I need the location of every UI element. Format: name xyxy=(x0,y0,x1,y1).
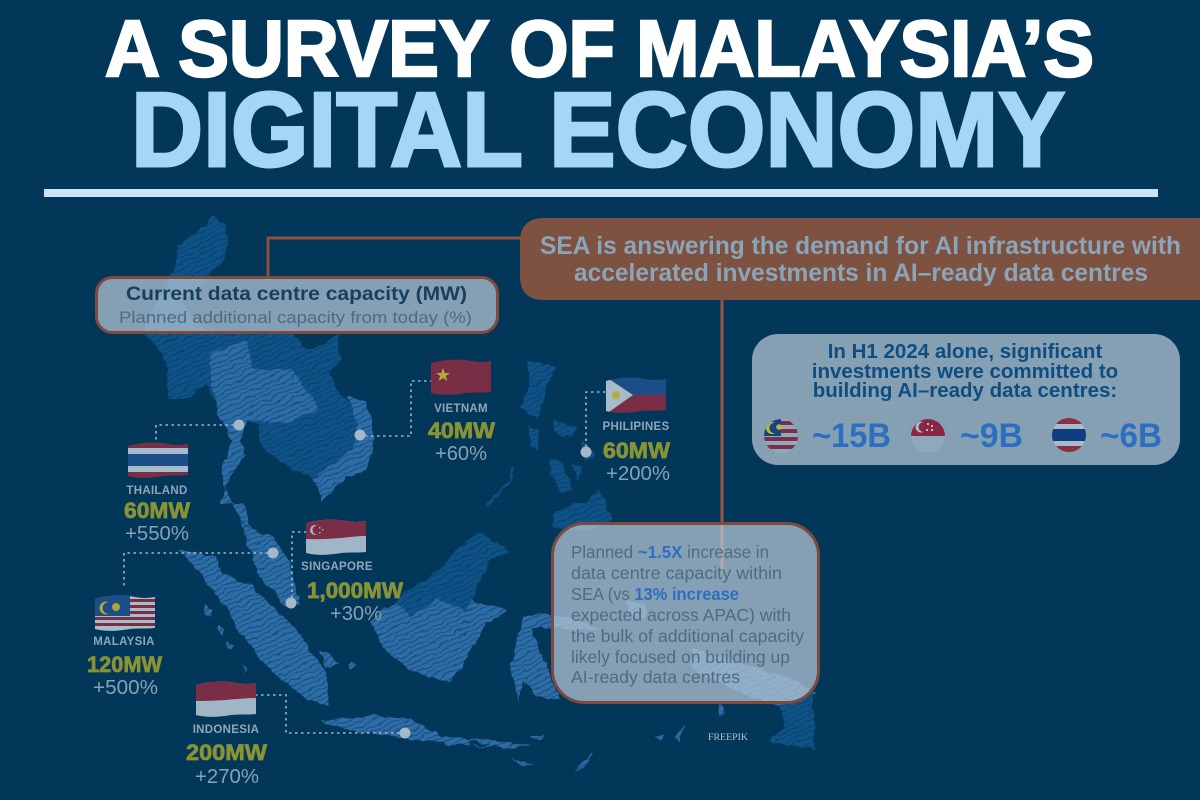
country: Thailand xyxy=(124,420,244,545)
map of Southeast Asia xyxy=(143,215,817,770)
title: DIGITAL ECONOMY xyxy=(131,71,1065,189)
investments heading: building AI–ready data centres: xyxy=(813,379,1117,402)
country: Vietnam xyxy=(354,359,495,465)
country: Philippines: PHILIPINES xyxy=(603,421,669,433)
flag: Singapore xyxy=(306,519,366,556)
value: Thailand investment: ~6B xyxy=(1100,417,1162,455)
investments heading: investments were committed to xyxy=(812,360,1118,383)
country: Vietnam: +60% xyxy=(435,443,487,465)
country: Singapore xyxy=(286,519,403,625)
country: Malaysia xyxy=(87,548,278,699)
country: Philippines xyxy=(580,377,670,485)
callout: planned capacity increase xyxy=(552,524,818,702)
country: Thailand: THAILAND xyxy=(126,485,188,497)
banner: SEA investments: SEA is answering the demand for AI infrastructure with xyxy=(540,232,1181,260)
title: A SURVEY OF MALAYSIA’S xyxy=(105,4,1094,93)
flag: Indonesia xyxy=(196,681,256,718)
country: Singapore: 1,000MW xyxy=(307,578,403,603)
callout: planned capacity increase: expected across APAC) with xyxy=(571,605,791,625)
legend subheading: Planned additional capacity from today (%) xyxy=(119,308,472,327)
panel: legend xyxy=(96,278,498,332)
icon: Malaysia flag circle xyxy=(764,419,798,453)
country: Thailand: +550% xyxy=(125,523,189,545)
icon: Singapore flag circle xyxy=(911,419,945,453)
country: Indonesia: 200MW xyxy=(186,740,267,765)
country: Indonesia xyxy=(186,681,410,788)
country: Philippines: 60MW xyxy=(603,438,670,463)
value: Singapore investment: ~9B xyxy=(960,417,1023,455)
country: Vietnam: 40MW xyxy=(428,418,495,443)
connector: banner to callout xyxy=(720,278,724,572)
title xyxy=(105,4,1094,189)
callout: planned capacity increase: likely focused on building up xyxy=(571,647,790,667)
icon: Thailand flag circle xyxy=(1052,418,1086,452)
country: Malaysia: MALAYSIA xyxy=(93,636,155,648)
callout: planned capacity increase: Planned ~1.5X increase in xyxy=(571,542,769,562)
country: Malaysia: +500% xyxy=(93,677,158,699)
flag: Vietnam xyxy=(431,359,491,396)
flag: Thailand xyxy=(128,442,188,479)
country: Philippines: +200% xyxy=(606,463,670,485)
callout: planned capacity increase: SEA (vs 13% increase xyxy=(571,584,739,604)
credit: FREEPIK xyxy=(708,733,748,743)
legend heading: Current data centre capacity (MW) xyxy=(126,283,467,305)
panel: H1 2024 investments xyxy=(752,334,1180,465)
callout: planned capacity increase: the bulk of additional capacity xyxy=(571,626,804,646)
flag: Malaysia xyxy=(95,595,155,632)
country: Indonesia: INDONESIA xyxy=(193,724,259,736)
callout: planned capacity increase: AI-ready data centres xyxy=(571,667,740,687)
country: Malaysia: 120MW xyxy=(87,652,162,677)
flag: Philippines xyxy=(606,377,666,414)
country: Vietnam: VIETNAM xyxy=(434,403,488,415)
title divider xyxy=(44,189,1158,197)
country: Singapore: SINGAPORE xyxy=(301,561,373,573)
callout: planned capacity increase: data centre capacity within xyxy=(571,563,782,583)
banner: SEA investments: accelerated investments in AI–ready data centres xyxy=(574,259,1148,287)
country: Thailand: 60MW xyxy=(124,498,190,523)
country: Indonesia: +270% xyxy=(195,766,259,788)
banner: SEA investments xyxy=(520,218,1200,300)
investments heading xyxy=(812,340,1118,402)
investments heading: In H1 2024 alone, significant xyxy=(828,340,1102,363)
connector: banner to legend xyxy=(268,238,525,280)
country: Singapore: +30% xyxy=(330,603,382,625)
value: Malaysia investment: ~15B xyxy=(812,417,891,455)
